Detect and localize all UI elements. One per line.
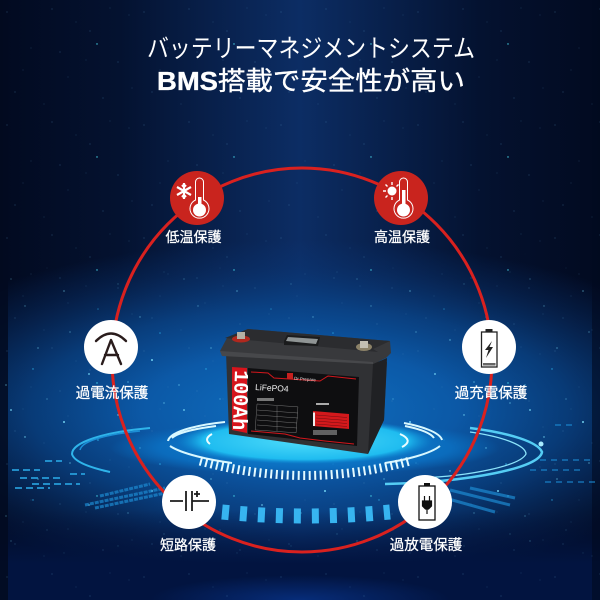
icon: charging battery — [462, 320, 516, 374]
chemistry name: LiFePO4 — [255, 382, 289, 394]
label: overcharge: 過充電保護 — [455, 385, 528, 402]
brand logo: Dr.Prepare — [294, 376, 316, 382]
icon: ampere — [84, 320, 138, 374]
label: high temperature: 高温保護 — [374, 229, 430, 245]
label: overcurrent: 過電流保護 — [76, 385, 149, 402]
warning box — [313, 403, 349, 435]
battery black label — [248, 368, 359, 446]
label: over-discharge: 過放電保護 — [390, 537, 463, 554]
protection: short circuit — [160, 475, 216, 553]
title line 2: BMS搭載で安全性が高い — [157, 66, 465, 96]
battery body — [220, 329, 391, 454]
protection: high temperature — [374, 171, 430, 245]
icon: cold thermometer — [170, 171, 224, 225]
icon: capacitor symbol — [162, 475, 216, 529]
protection: low temperature — [166, 171, 224, 245]
protection: over-discharge — [390, 475, 463, 554]
icon: battery with plug — [398, 475, 452, 529]
battery terminals — [232, 332, 372, 351]
protection: overcharge — [455, 320, 528, 402]
glowing concentric rings under battery — [12, 418, 595, 516]
label: short circuit: 短路保護 — [160, 537, 216, 553]
label: low temperature: 低温保護 — [166, 229, 222, 245]
specification table — [255, 398, 298, 433]
icon: hot thermometer — [374, 171, 428, 225]
battery — [220, 329, 391, 454]
title — [147, 35, 475, 96]
battery red strip with capacity: 100Ah — [226, 370, 251, 431]
protection: overcurrent — [76, 320, 149, 402]
red protection circle — [112, 168, 492, 552]
title line 1: バッテリーマネジメントシステム — [147, 35, 475, 63]
